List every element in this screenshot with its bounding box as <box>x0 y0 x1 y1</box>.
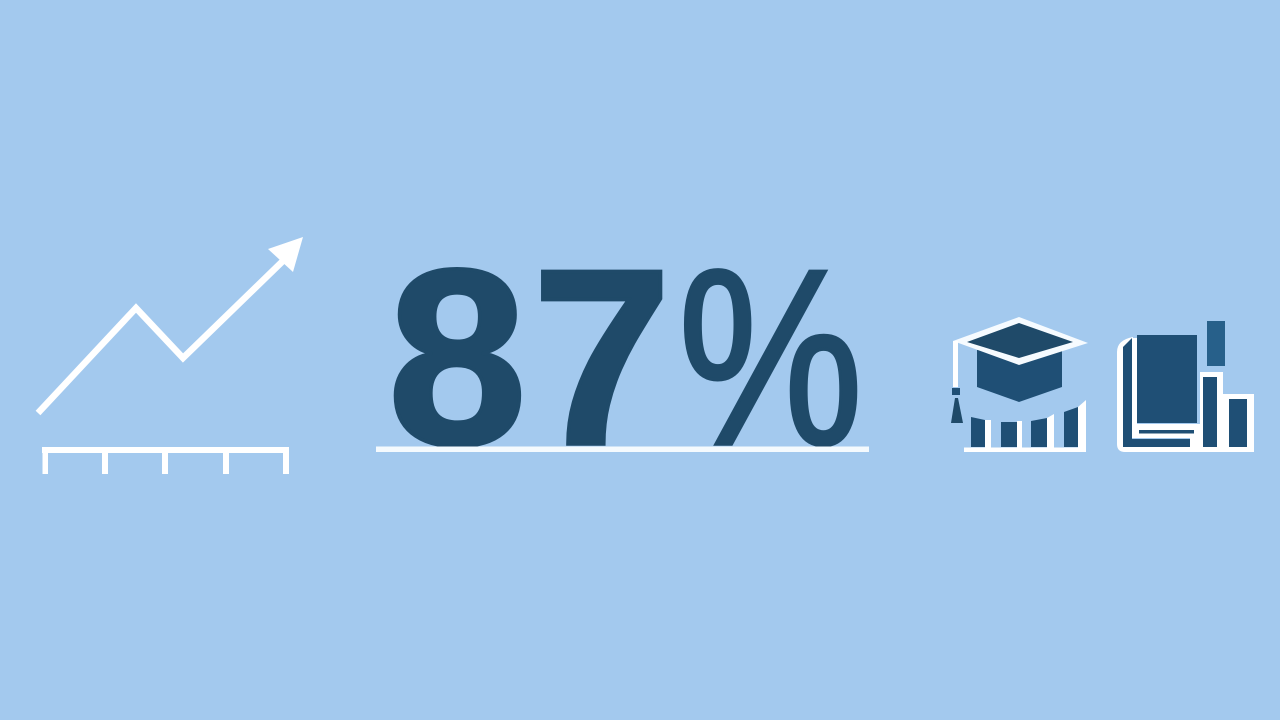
headline statistic: 87% <box>388 217 863 498</box>
headline statistic: 87%: 8 <box>388 218 527 498</box>
icon: rising line chart with ruler <box>38 237 303 474</box>
small bar chart <box>964 400 1086 452</box>
icon: graduation cap with bars <box>951 317 1088 452</box>
book spine <box>1123 338 1190 447</box>
book page block <box>1137 335 1197 423</box>
underline <box>376 446 869 452</box>
rising arrow line <box>38 237 303 413</box>
headline statistic: 87%: % <box>678 217 863 497</box>
ruler axis <box>42 447 289 474</box>
icon: book with bars <box>1117 321 1254 452</box>
mortarboard <box>953 317 1088 365</box>
book cover <box>1117 337 1200 452</box>
headline statistic: 87%: 7 <box>532 218 672 498</box>
page white edges <box>1132 338 1197 438</box>
bars beside book <box>1196 321 1254 452</box>
cap body <box>977 350 1062 402</box>
tassel <box>951 341 963 423</box>
